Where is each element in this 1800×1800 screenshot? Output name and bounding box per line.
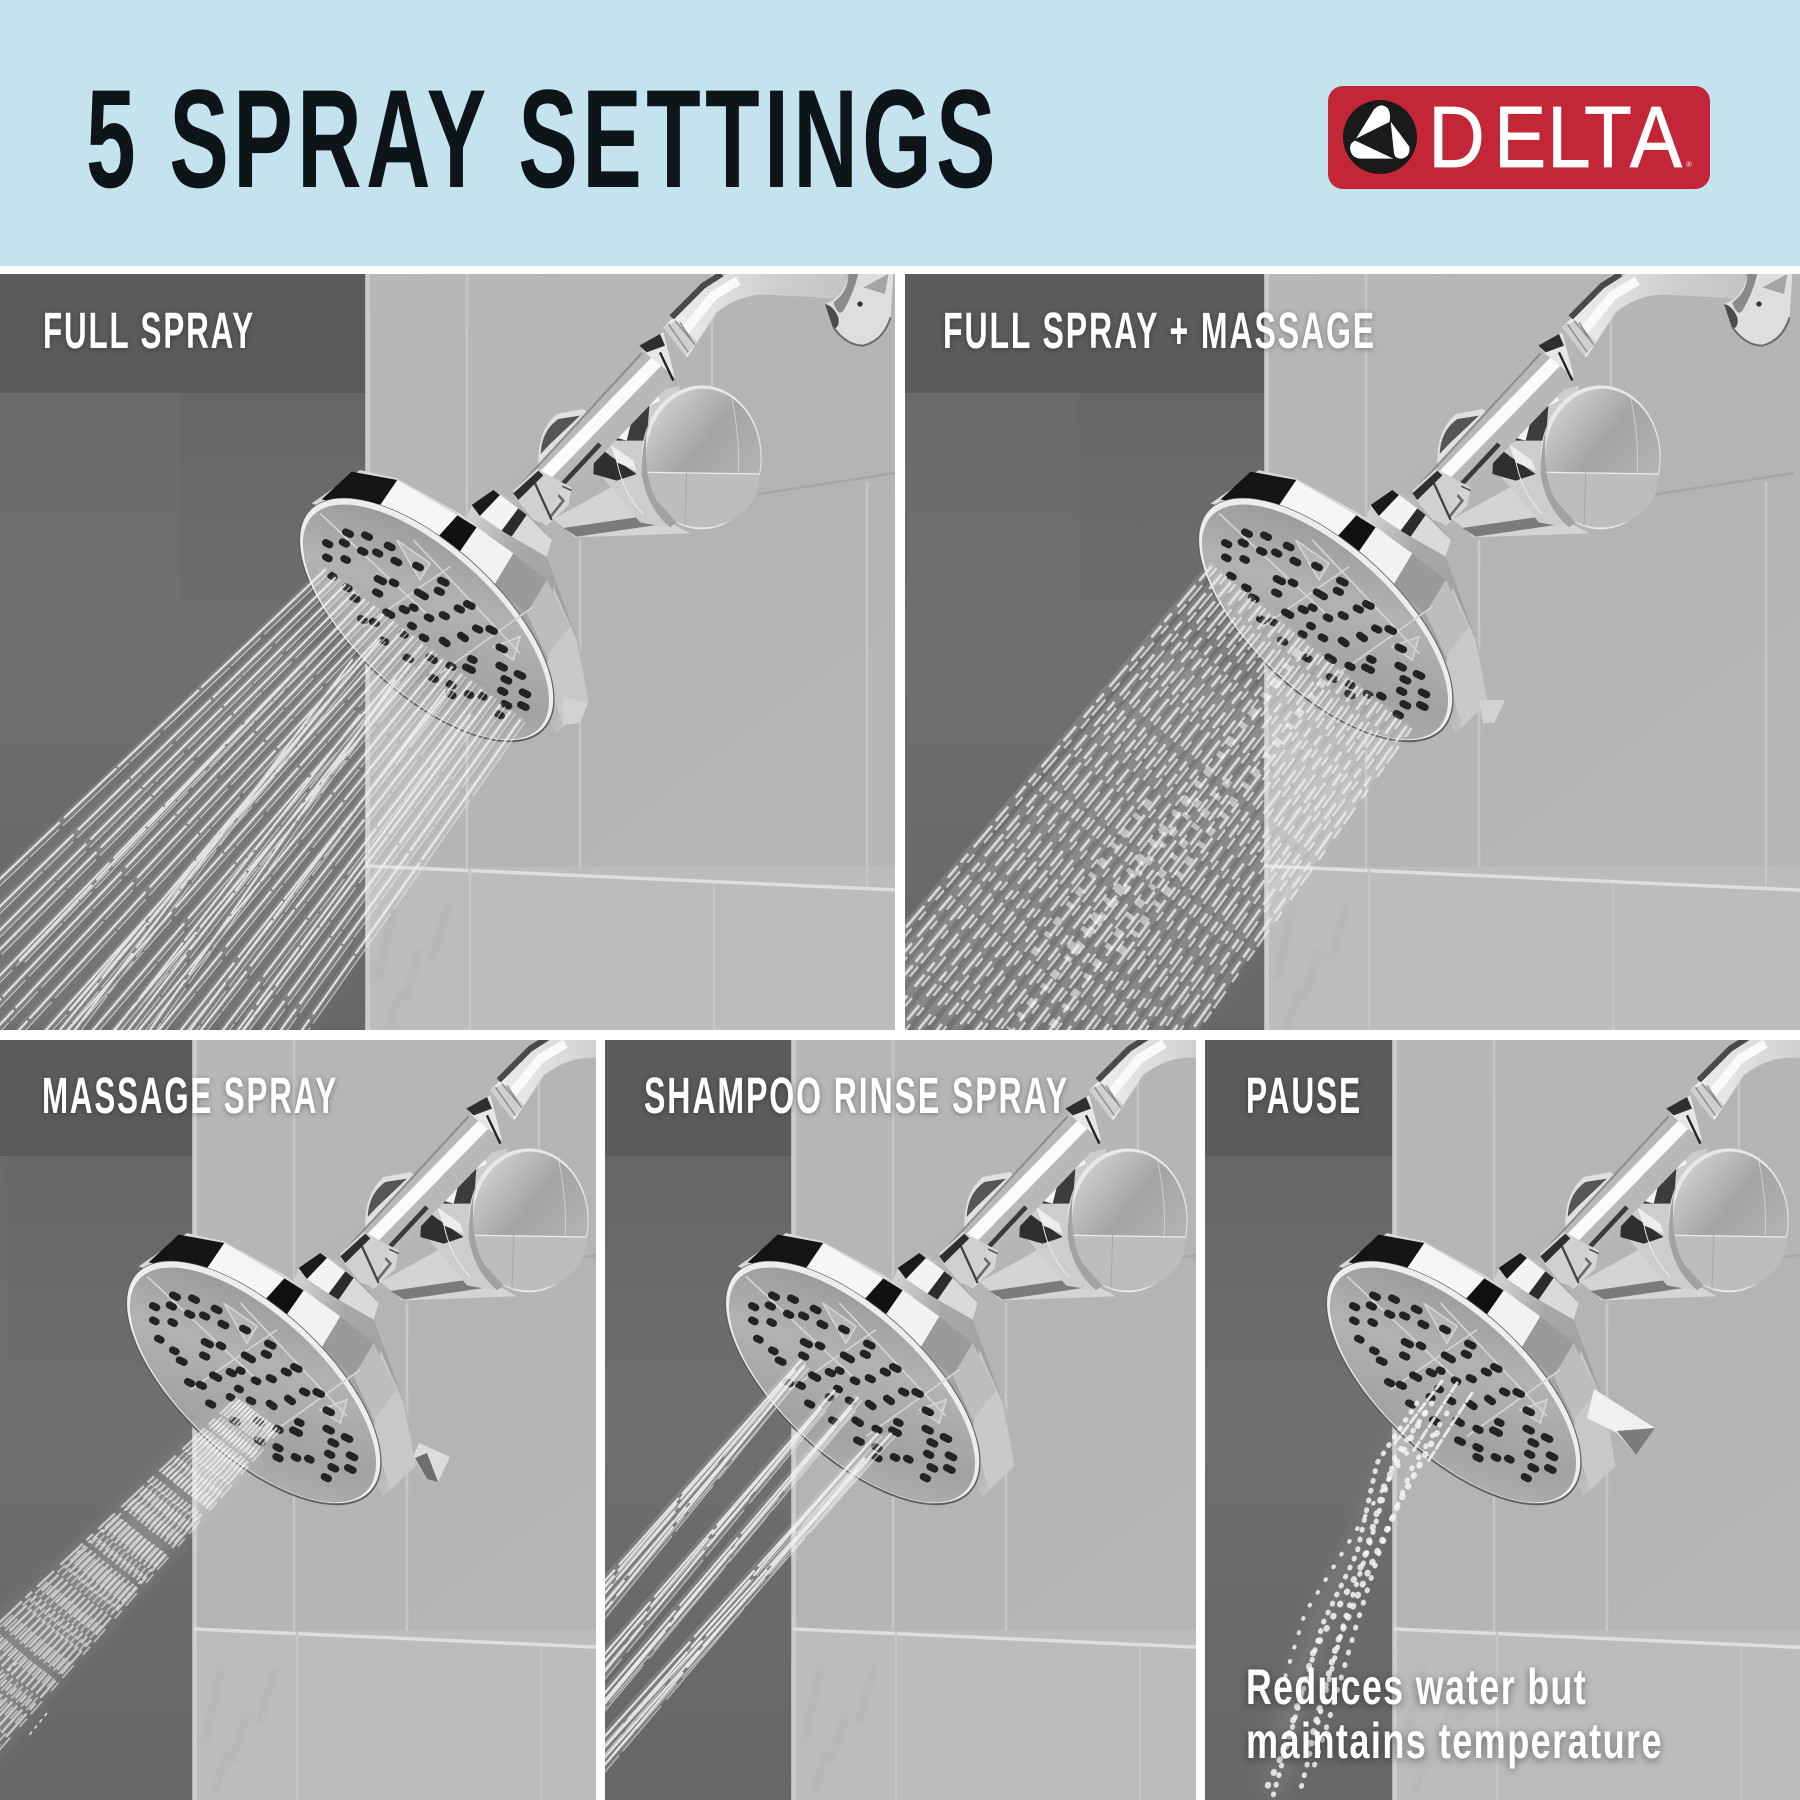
panel: full spray + massage xyxy=(819,270,1800,1045)
logo: Delta xyxy=(1328,86,1710,189)
title: 5 SPRAY SETTINGS xyxy=(86,60,1000,217)
photo: massage spray xyxy=(0,1040,596,1800)
panel: massage spray xyxy=(0,1033,837,1800)
label: pause: PAUSE xyxy=(1246,1067,1362,1124)
logo: Delta: ® xyxy=(1686,160,1692,169)
label: shampoo rinse spray: SHAMPOO RINSE SPRAY xyxy=(644,1067,1069,1124)
photo: full spray + massage xyxy=(905,274,1800,1030)
panel: pause xyxy=(1017,1033,1800,1800)
text block: pause note xyxy=(1246,1659,1663,1769)
photo: pause xyxy=(1205,1040,1800,1800)
logo: Delta: DELTA xyxy=(1428,88,1683,186)
label: full spray: FULL SPRAY xyxy=(43,302,255,359)
panel: full spray xyxy=(0,270,1010,1045)
label: massage spray: MASSAGE SPRAY xyxy=(42,1067,338,1124)
text block: pause note: Reduces water but xyxy=(1246,1659,1587,1715)
photo: full spray xyxy=(0,274,895,1030)
photo: shampoo rinse spray xyxy=(605,1040,1196,1800)
panel: shampoo rinse spray xyxy=(416,1033,1436,1800)
header band xyxy=(0,0,1800,266)
label: full spray + massage: FULL SPRAY + MASSAGE xyxy=(943,302,1376,359)
